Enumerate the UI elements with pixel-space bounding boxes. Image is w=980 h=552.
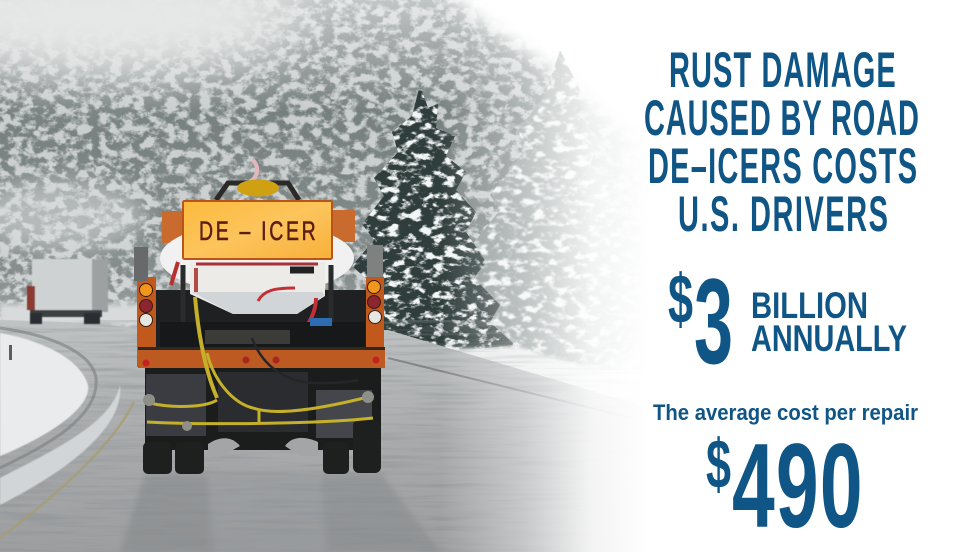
white tank — [160, 222, 354, 314]
small bar reflectors — [142, 356, 380, 366]
sign: DE-ICER: DE – ICER — [199, 216, 316, 246]
ghost evergreen tree — [474, 50, 614, 362]
stat: $3 billion annually: ANNUALLY — [751, 318, 907, 359]
heading: U.S. DRIVERS — [678, 186, 888, 242]
heading — [644, 42, 919, 242]
heading: RUST DAMAGE — [669, 42, 896, 98]
side mirrors — [134, 247, 148, 281]
heading: DE–ICERS COSTS — [648, 138, 917, 194]
orange cross bar — [138, 349, 385, 368]
sign: DE-ICER — [183, 201, 332, 259]
equipment controls — [205, 330, 290, 344]
black equipment shelf — [160, 322, 365, 350]
snowbank behind road right — [385, 347, 640, 425]
de-icer truck — [134, 160, 385, 474]
left tail lights — [140, 284, 152, 326]
fog at top left — [0, 0, 300, 76]
pale sky — [432, 0, 680, 170]
orange rear uprights — [137, 277, 156, 367]
axle snow spray — [208, 438, 318, 458]
background photo: snowy road — [0, 0, 620, 552]
stat: $3 billion annually — [668, 253, 907, 389]
mud flap centre — [218, 372, 308, 432]
stat: $3 billion annually: $ — [668, 260, 693, 338]
beacon mount — [216, 183, 299, 200]
snow shoulder left — [0, 333, 120, 505]
blue fitting — [310, 318, 332, 326]
road surface — [0, 320, 650, 552]
amber beacon — [237, 180, 279, 196]
rear wheels — [143, 420, 381, 474]
evergreen tree — [352, 85, 515, 350]
white fade to right panel — [440, 0, 652, 552]
roadside post — [9, 345, 12, 360]
road edge line — [388, 358, 640, 420]
black hose — [252, 338, 358, 383]
heading: CAUSED BY ROAD — [644, 90, 919, 146]
subheading: average cost: The average cost per repair — [653, 400, 918, 425]
body dark backing — [156, 290, 366, 352]
tank piping — [171, 262, 331, 324]
pink hose — [250, 160, 257, 182]
left road stripe — [0, 402, 134, 538]
stat: $3 billion annually: 3 — [694, 253, 733, 389]
lower chassis — [145, 366, 381, 450]
wheel spray tracks — [120, 474, 215, 552]
stat: $490: 490 — [732, 420, 863, 552]
spray nozzles — [143, 391, 374, 431]
yellow hoses — [147, 297, 373, 424]
right tail lights — [368, 280, 382, 324]
mud flap left — [146, 374, 206, 436]
stat: $490: $ — [706, 425, 731, 503]
top orange side walls — [162, 211, 182, 243]
snowy hillside — [0, 0, 660, 370]
distant snow line — [0, 304, 400, 326]
stat: $3 billion annually: BILLION — [751, 285, 868, 326]
mud flap right — [316, 390, 372, 438]
text panel — [644, 42, 919, 552]
pale snow slope on hill — [0, 179, 145, 251]
distant truck — [27, 259, 108, 324]
